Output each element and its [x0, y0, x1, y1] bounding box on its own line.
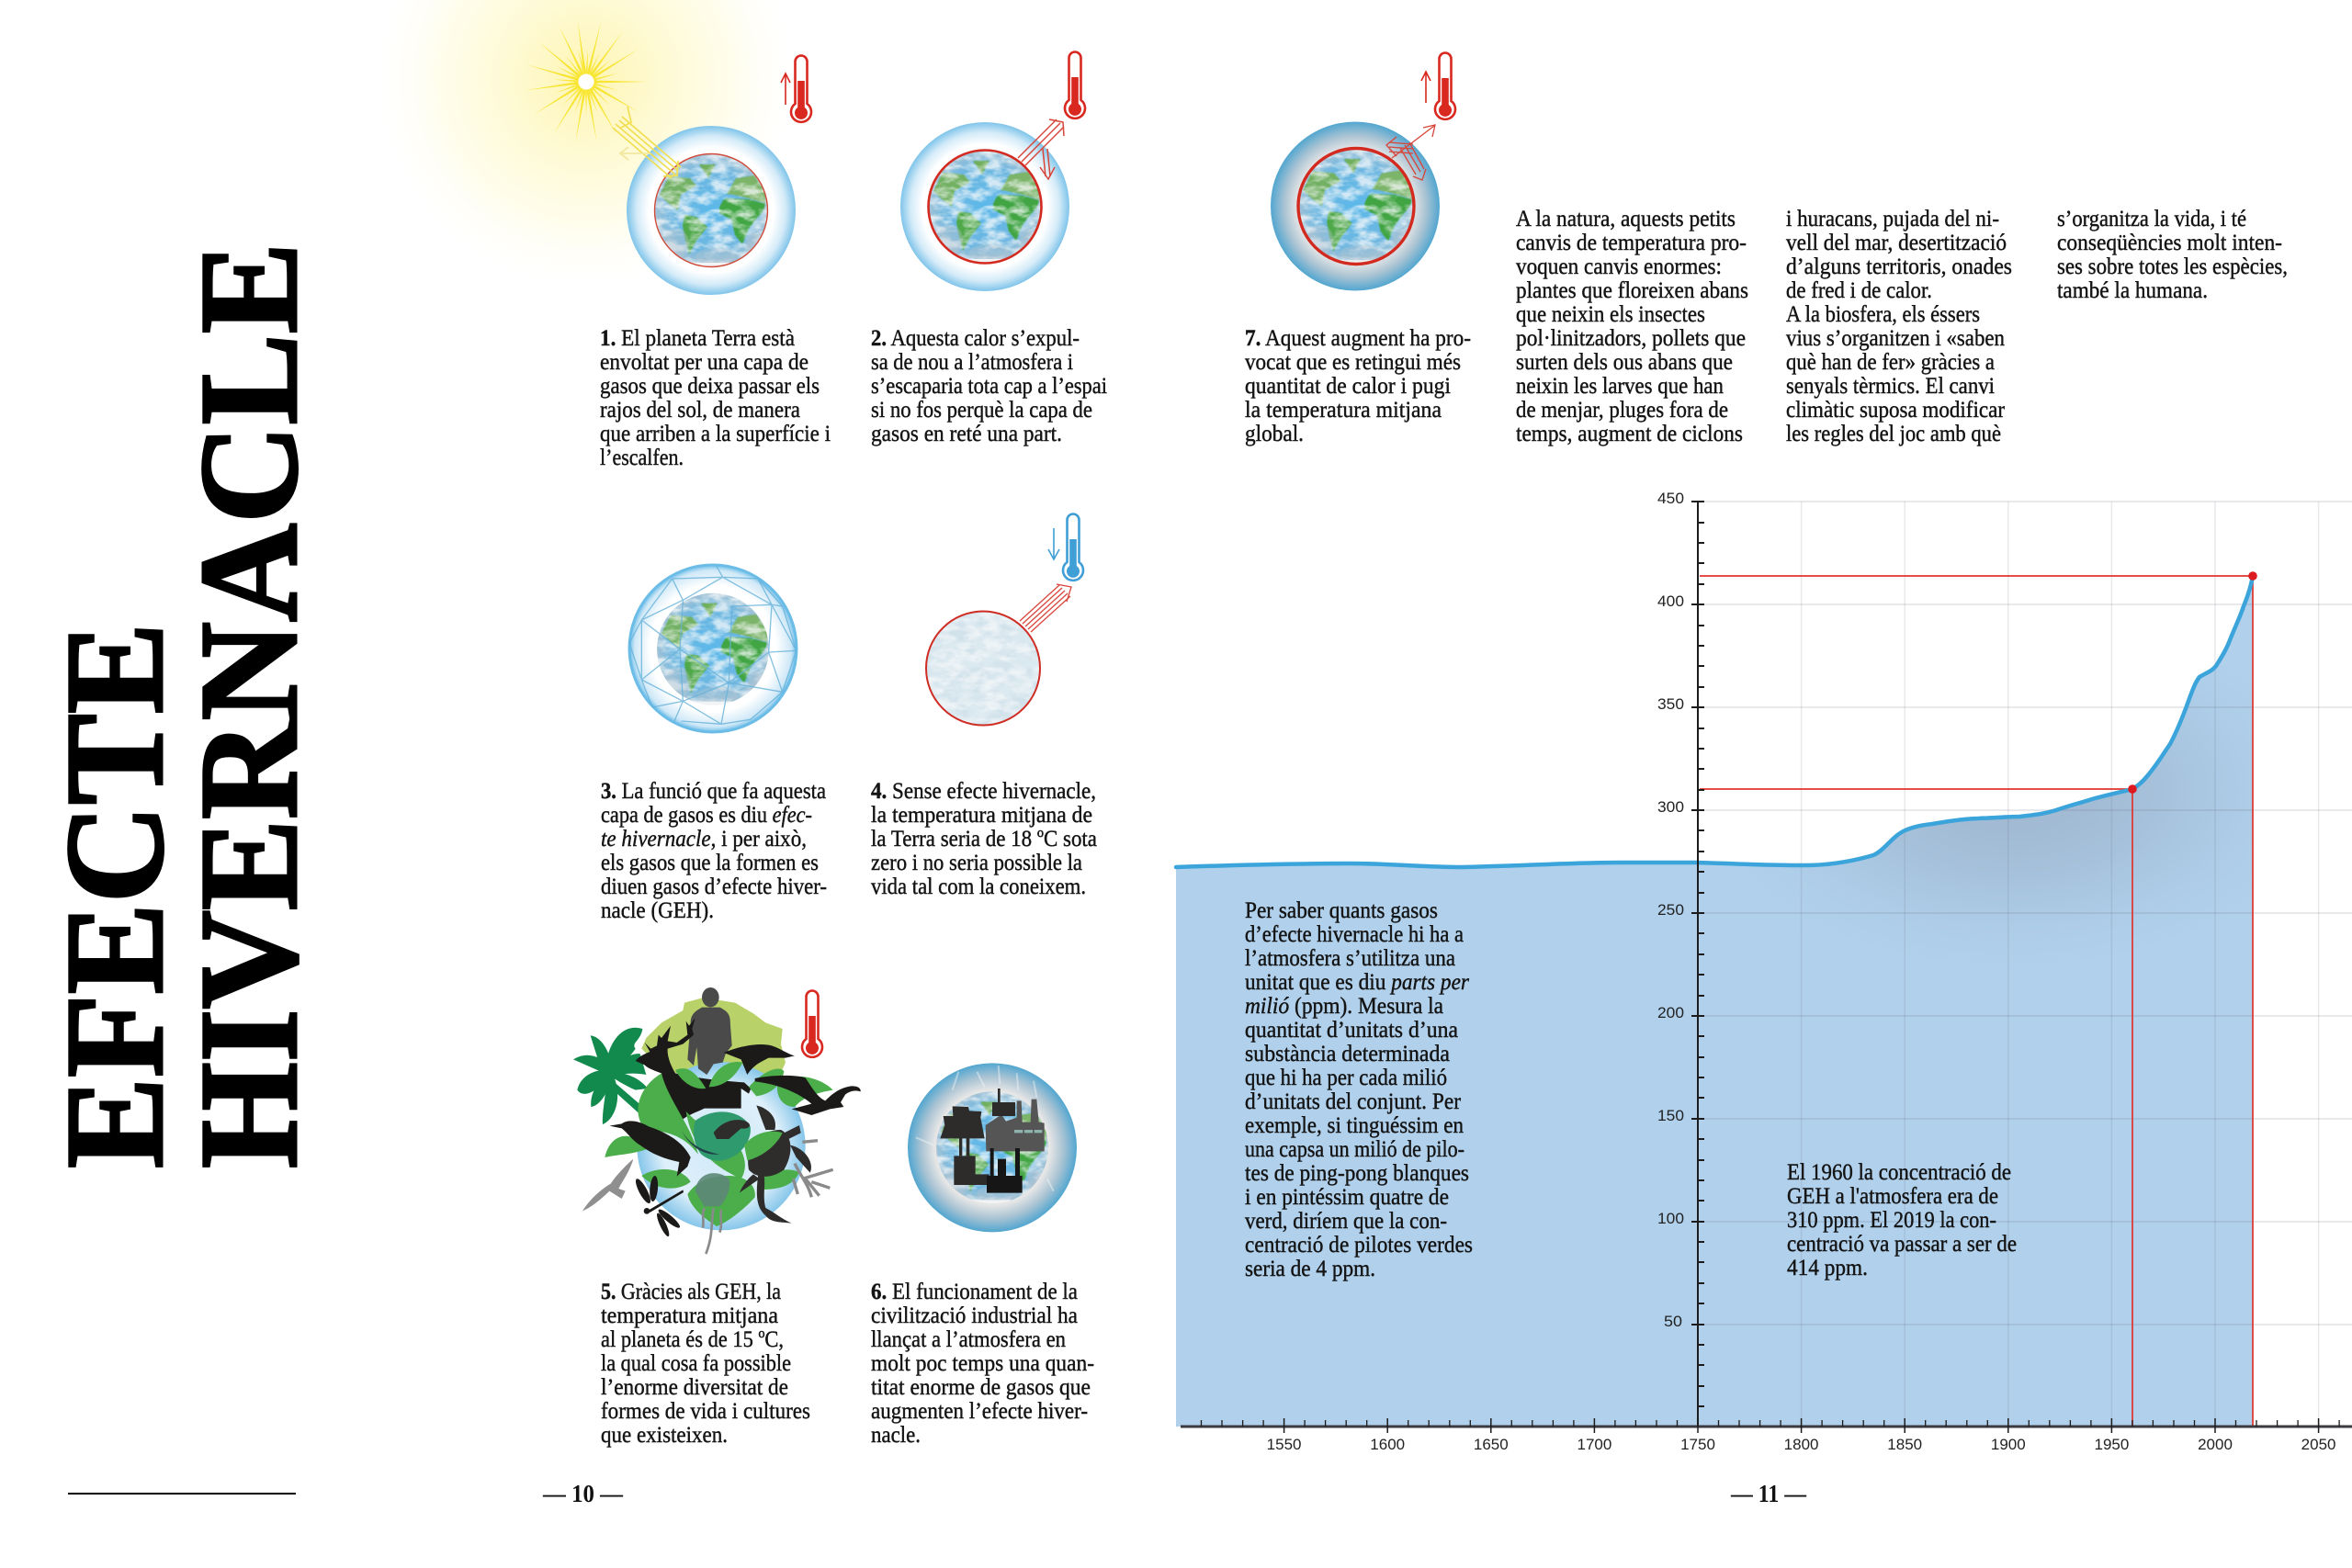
text: column, nature effects: de menjar, pluges fora de	[1516, 398, 1728, 423]
text: parts per million explanation: d’unitats del conjunt. Per	[1245, 1089, 1462, 1114]
icon: thermometer 2	[1065, 51, 1085, 118]
text: step 6: civilització industrial ha	[871, 1303, 1078, 1328]
text: column, consequences: ses sobre totes les espècies,	[2057, 254, 2288, 279]
chart area fill	[1176, 576, 2253, 1427]
text: step 5: temperatura mitjana	[601, 1303, 778, 1328]
text: step 4: la temperatura mitjana de	[871, 803, 1092, 828]
text: column, biosphere: i huracans, pujada del ni-	[1786, 207, 1999, 231]
text: step 3: diuen gasos d’efecte hiver-	[601, 874, 827, 899]
text: column, nature effects: temps, augment de ciclons	[1516, 422, 1743, 446]
text: column, nature effects: canvis de temperatura pro-	[1516, 231, 1747, 255]
text: parts per million explanation: una capsa un milió de pilo-	[1245, 1137, 1464, 1162]
text: step 5: formes de vida i cultures	[601, 1399, 810, 1424]
text: column, nature effects: voquen canvis enormes:	[1516, 254, 1722, 279]
illustration 3: geodesic greenhouse around earth	[628, 564, 797, 733]
x axis labels: 1950	[2094, 1436, 2129, 1453]
text: column, biosphere: d’alguns territoris, onades	[1786, 254, 2012, 279]
y axis	[1691, 502, 1704, 1427]
text: step 6: molt poc temps una quan-	[871, 1351, 1094, 1376]
text: parts per million explanation: tes de ping-pong blanques	[1245, 1161, 1469, 1186]
data point 2019	[2248, 571, 2257, 581]
x axis labels: 2050	[2301, 1436, 2336, 1453]
red marker lines 1960 and 2019	[1700, 576, 2253, 1427]
illustration 5: diversity of life around earth	[573, 987, 861, 1254]
y axis labels: 150	[1657, 1107, 1684, 1124]
text: parts per million explanation: milió (ppm). Mesura la	[1245, 994, 1443, 1019]
text: step 6: llançat a l’atmosfera en	[871, 1327, 1066, 1352]
text: column, biosphere: A la biosfera, els éssers	[1786, 302, 1980, 327]
illustration 4: frozen earth without greenhouse effect	[926, 584, 1071, 726]
y axis labels: 200	[1657, 1004, 1684, 1021]
text: step 5: la qual cosa fa possible	[601, 1351, 791, 1376]
text: column, consequences: s’organitza la vida, i té	[2057, 207, 2246, 231]
title: Efecte hivernacle: EFECTE	[38, 623, 193, 1168]
illustration 7: thicker gas layer	[1271, 121, 1440, 290]
text: parts per million explanation: l’atmosfera s’utilitza una	[1245, 946, 1455, 971]
text: step 1: que arriben a la superfície i	[600, 422, 831, 446]
data line	[1176, 576, 2253, 867]
page number 11: — 11 —	[1730, 1480, 1807, 1507]
text: step 2: 2. Aquesta calor s’expul-	[871, 326, 1080, 351]
text: step 2: si no fos perquè la capa de	[871, 398, 1092, 423]
text: step 7: vocat que es retingui més	[1245, 350, 1461, 375]
text: step 4: la Terra seria de 18 ºC sota	[871, 827, 1097, 852]
text: parts per million explanation: i en pintéssim quatre de	[1245, 1185, 1449, 1210]
data point 1960	[2128, 784, 2137, 794]
text: column, biosphere: senyals tèrmics. El canvi	[1786, 374, 1995, 399]
y axis labels: 300	[1657, 798, 1684, 816]
text: step 2	[871, 326, 1107, 446]
text: step 2: s’escaparia tota cap a l’espai	[871, 374, 1107, 399]
text: step 7: la temperatura mitjana	[1245, 398, 1442, 423]
text: parts per million explanation: seria de 4 ppm.	[1245, 1257, 1375, 1281]
text: column, biosphere: les regles del joc amb què	[1786, 422, 2001, 446]
text: step 2: gasos en reté una part.	[871, 422, 1062, 446]
illustration 1: earth with atmosphere and sun	[525, 20, 796, 295]
text: step 6: nacle.	[871, 1423, 921, 1448]
x axis labels: 1550	[1267, 1436, 1302, 1453]
text: step 5: al planeta és de 15 ºC,	[601, 1327, 784, 1352]
text: parts per million explanation	[1245, 898, 1473, 1281]
illustration 2: heat leaving earth	[900, 119, 1069, 291]
text: step 3	[601, 779, 827, 923]
icon: thermometer 7	[1421, 53, 1455, 119]
y axis labels: 250	[1657, 901, 1684, 919]
arrow: heat rays	[1018, 119, 1064, 179]
icon: sun	[525, 20, 648, 142]
chart: CO2 concentration in ppm over time	[1176, 490, 2352, 1453]
text: column, consequences	[2057, 207, 2288, 303]
text: step 6: titat enorme de gasos que	[871, 1375, 1091, 1400]
text: 1960 to 2019 concentration note: centració va passar a ser de	[1787, 1232, 2017, 1257]
text: column, nature effects: A la natura, aquests petits	[1516, 207, 1736, 231]
arrow: all heat escapes	[1020, 584, 1071, 632]
sun glow	[379, 0, 793, 285]
x axis labels: 2000	[2198, 1436, 2233, 1453]
text: column, consequences: també la humana.	[2057, 278, 2208, 303]
text: step 1: 1. El planeta Terra està	[600, 326, 795, 351]
x axis labels: 1900	[1991, 1436, 2026, 1453]
text: 1960 to 2019 concentration note: 414 ppm.	[1787, 1256, 1868, 1280]
text: step 6	[871, 1280, 1094, 1448]
text: step 4	[871, 779, 1097, 899]
arrow: sunlight beam	[613, 107, 681, 178]
page number 10: — 10 —	[542, 1480, 624, 1507]
text: step 4: vida tal com la coneixem.	[871, 874, 1086, 899]
illustration 6: industry on earth	[908, 1063, 1077, 1232]
text: step 3: els gasos que la formen es	[601, 851, 819, 875]
text: step 1: envoltat per una capa de	[600, 350, 808, 375]
text: step 1: gasos que deixa passar els	[600, 374, 820, 399]
text: step 7: 7. Aquest augment ha pro-	[1245, 326, 1471, 351]
x axis labels: 1650	[1474, 1436, 1509, 1453]
text: step 2: sa de nou a l’atmosfera i	[871, 350, 1073, 375]
title: Efecte hivernacle: HIVERNACLE	[172, 243, 327, 1168]
x axis labels: 1600	[1370, 1436, 1405, 1453]
text: step 4: 4. Sense efecte hivernacle,	[871, 779, 1096, 804]
y axis labels: 400	[1657, 592, 1684, 610]
text: 1960 to 2019 concentration note	[1787, 1160, 2017, 1280]
text: parts per million explanation: exemple, si tinguéssim en	[1245, 1113, 1464, 1138]
text: parts per million explanation: unitat que es diu parts per	[1245, 970, 1469, 995]
text: 1960 to 2019 concentration note: El 1960 la concentració de	[1787, 1160, 2011, 1185]
text: step 1	[600, 326, 831, 470]
y axis labels: 450	[1657, 490, 1684, 507]
title rule	[68, 1493, 296, 1495]
text: 1960 to 2019 concentration note: 310 ppm. El 2019 la con-	[1787, 1208, 1996, 1233]
icon: cold thermometer	[1048, 514, 1083, 581]
text: step 1: rajos del sol, de manera	[600, 398, 800, 423]
text: column, nature effects: neixin les larves que han	[1516, 374, 1724, 399]
text: column, nature effects: surten dels ous abans que	[1516, 350, 1733, 375]
text: 1960 to 2019 concentration note: GEH a l'atmosfera era de	[1787, 1184, 1998, 1209]
y axis labels: 100	[1657, 1210, 1684, 1227]
text: step 3: capa de gasos es diu efec-	[601, 803, 812, 828]
text: column, nature effects	[1516, 207, 1748, 446]
y axis labels: 50	[1664, 1313, 1682, 1330]
text: column, nature effects: plantes que floreixen abans	[1516, 278, 1748, 303]
text: step 3: te hivernacle, i per això,	[601, 827, 807, 852]
text: parts per million explanation: Per saber quants gasos	[1245, 898, 1438, 923]
text: step 4: zero i no seria possible la	[871, 851, 1082, 875]
text: step 6: augmenten l’efecte hiver-	[871, 1399, 1088, 1424]
text: step 5: l’enorme diversitat de	[601, 1375, 788, 1400]
title: Efecte hivernacle	[38, 243, 327, 1168]
y axis labels	[1657, 490, 1684, 1330]
text: parts per million explanation: substància determinada	[1245, 1042, 1450, 1066]
text: column, biosphere: vius s’organitzen i «saben	[1786, 326, 2005, 351]
y axis labels: 350	[1657, 695, 1684, 713]
text: parts per million explanation: verd, diríem que la con-	[1245, 1209, 1447, 1234]
text: column, biosphere: climàtic suposa modificar	[1786, 398, 2006, 423]
text: parts per million explanation: d’efecte hivernacle hi ha a	[1245, 922, 1464, 947]
text: step 1: l’escalfen.	[600, 446, 684, 470]
text: step 3: 3. La funció que fa aquesta	[601, 779, 826, 804]
text: parts per million explanation: quantitat d’unitats d’una	[1245, 1018, 1458, 1043]
icon: thermometer 1	[781, 55, 811, 122]
text: column, nature effects: pol·linitzadors, pollets que	[1516, 326, 1746, 351]
text: column, biosphere: de fred i de calor.	[1786, 278, 1932, 303]
text: column, consequences: conseqüències molt inten-	[2057, 231, 2282, 255]
x axis labels: 1750	[1680, 1436, 1715, 1453]
icon: thermometer 5	[802, 990, 822, 1057]
x axis labels: 1800	[1784, 1436, 1819, 1453]
text: parts per million explanation: que hi ha per cada milió	[1245, 1066, 1447, 1090]
text: parts per million explanation: centració de pilotes verdes	[1245, 1233, 1473, 1258]
x axis	[1181, 1418, 2352, 1433]
text: step 7: quantitat de calor i pugi	[1245, 374, 1451, 399]
text: step 5: 5. Gràcies als GEH, la	[601, 1280, 781, 1304]
text: step 6: 6. El funcionament de la	[871, 1280, 1078, 1304]
text: column, biosphere: vell del mar, desertització	[1786, 231, 2007, 255]
x axis labels	[1267, 1436, 2336, 1453]
text: step 3: nacle (GEH).	[601, 898, 714, 923]
text: step 7	[1245, 326, 1471, 446]
chart grid	[1704, 502, 2352, 1427]
text: column, nature effects: que neixin els insectes	[1516, 302, 1705, 327]
text: step 7: global.	[1245, 422, 1304, 446]
text: step 5	[601, 1280, 810, 1448]
text: step 5: que existeixen.	[601, 1423, 728, 1448]
x axis labels: 1850	[1887, 1436, 1922, 1453]
text: column, biosphere: què han de fer» gràcies a	[1786, 350, 1995, 375]
arrow: trapped heat	[1386, 125, 1435, 180]
text: column, biosphere	[1786, 207, 2012, 446]
x axis labels: 1700	[1577, 1436, 1611, 1453]
